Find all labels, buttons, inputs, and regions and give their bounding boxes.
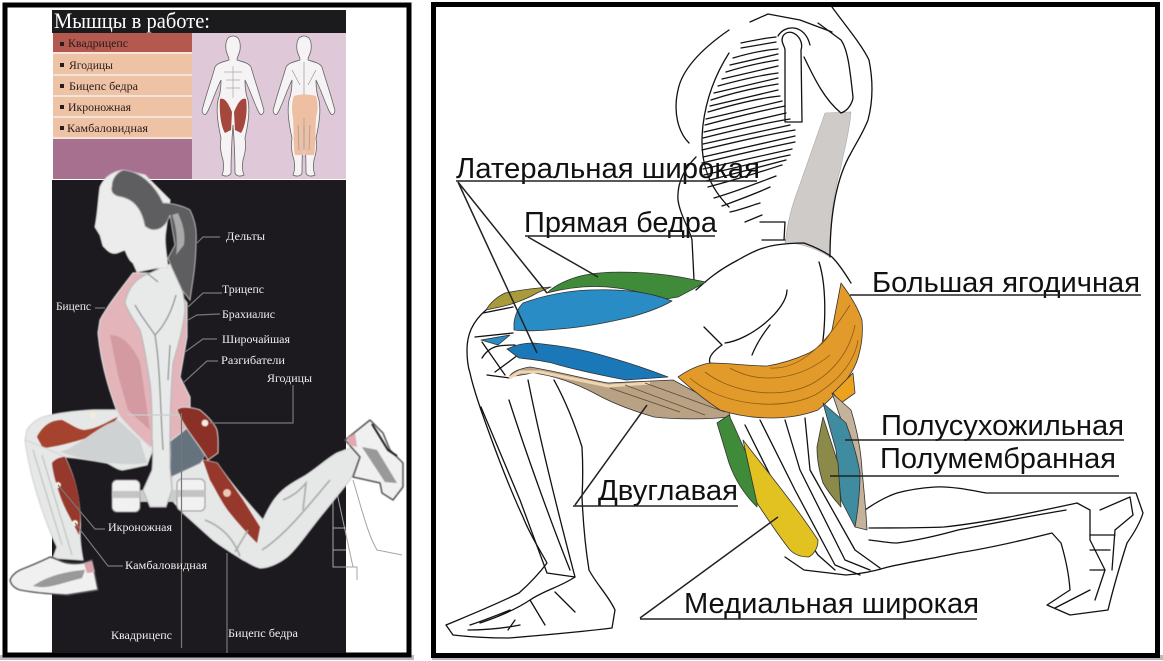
muscle labels: Брахиалис xyxy=(222,309,275,321)
head and neck xyxy=(95,170,170,272)
label: Медиальная широкая xyxy=(640,517,979,620)
back shoe xyxy=(345,420,403,500)
torso top xyxy=(98,273,190,447)
knee xyxy=(475,307,518,378)
muscle labels: Бицепс бедра xyxy=(228,628,298,640)
muscle: vastus lateralis blue lower xyxy=(507,343,668,380)
muscle list: Ягодицы xyxy=(69,58,113,72)
icon: back figure xyxy=(273,36,335,176)
glute xyxy=(177,407,218,460)
muscle: olive strip xyxy=(486,287,551,310)
title bar xyxy=(52,8,346,33)
label: Латеральная широкая: Латеральная широкая xyxy=(456,153,760,185)
dumbbell xyxy=(112,479,205,512)
label: Большая ягодичная: Большая ягодичная xyxy=(872,267,1140,299)
label: Полусухожильная: Полусухожильная xyxy=(881,410,1124,442)
label: Медиальная широкая: Медиальная широкая xyxy=(684,588,979,620)
body map panel xyxy=(192,33,346,179)
muscle: biceps femoris tan xyxy=(509,367,730,419)
muscle: erector spinae grey xyxy=(785,112,851,257)
muscle: small blue tendon xyxy=(481,335,510,345)
muscle labels: Камбаловидная xyxy=(125,560,208,572)
dark background panel xyxy=(52,180,346,653)
humerus and scapula xyxy=(782,32,802,122)
muscle: gluteus lower orange xyxy=(833,373,855,403)
muscle: rectus femoris green xyxy=(547,272,706,300)
ribcage xyxy=(702,53,729,207)
arm xyxy=(125,263,185,507)
muscle labels: Квадрицепс xyxy=(111,630,172,642)
faint lines outside panel xyxy=(333,480,402,580)
rear leg xyxy=(785,487,1143,615)
muscle list xyxy=(53,33,192,179)
label: Двуглавая: Двуглавая xyxy=(598,475,738,507)
muscle labels: Икроножная xyxy=(108,522,173,534)
label: Полумембранная: Полумембранная xyxy=(880,443,1116,475)
label: Двуглавая xyxy=(573,405,738,507)
figure: woman doing lunge with dumbbells xyxy=(10,170,403,595)
muscle labels: Ягодицы xyxy=(267,373,312,385)
muscle: gluteus maximus orange xyxy=(678,283,862,418)
muscle list: Камбаловидная xyxy=(67,121,148,135)
muscle list: Бицепс бедра xyxy=(69,79,139,93)
muscle labels: Трицепс xyxy=(222,284,264,296)
front shoe xyxy=(10,557,98,595)
front thigh xyxy=(25,410,160,470)
muscle: semimembranosus tan xyxy=(832,393,867,530)
muscle: medial green xyxy=(717,415,757,507)
muscle: semimembranosus olive xyxy=(817,417,841,507)
spine stub xyxy=(760,222,785,240)
muscle labels: Бицепс xyxy=(56,301,91,313)
muscle: vastus lateralis blue upper xyxy=(514,290,672,331)
label: Прямая бедра: Прямая бедра xyxy=(524,207,718,239)
torso outline xyxy=(676,30,729,143)
title bar: Мышцы в работе: xyxy=(54,8,210,33)
figure: skeleton outlines xyxy=(446,7,1143,638)
muscle labels: Дельты xyxy=(226,231,265,243)
label: Прямая бедра xyxy=(524,207,718,277)
muscle list: Икроножная xyxy=(68,100,131,114)
hair xyxy=(112,170,196,300)
panel: anatomical diagram xyxy=(432,4,1163,660)
label: Латеральная широкая xyxy=(456,153,760,353)
icon: front figure xyxy=(202,36,264,176)
muscle labels: Широчайшая xyxy=(222,334,291,346)
front lower leg xyxy=(25,440,83,560)
back leg xyxy=(172,447,360,568)
muscle: vastus medialis yellow xyxy=(743,440,818,557)
muscle marker dots xyxy=(55,420,208,526)
muscle labels xyxy=(56,231,312,642)
leader lines xyxy=(58,237,293,653)
muscle: semitendinosus teal xyxy=(823,403,860,527)
muscle labels: Разгибатели xyxy=(221,355,285,367)
front lower leg xyxy=(446,310,615,638)
muscle list: Квадрицепс xyxy=(68,36,128,50)
shorts xyxy=(170,425,207,477)
hip bone xyxy=(696,243,851,290)
panel: exercise muscles illustration xyxy=(0,5,414,660)
